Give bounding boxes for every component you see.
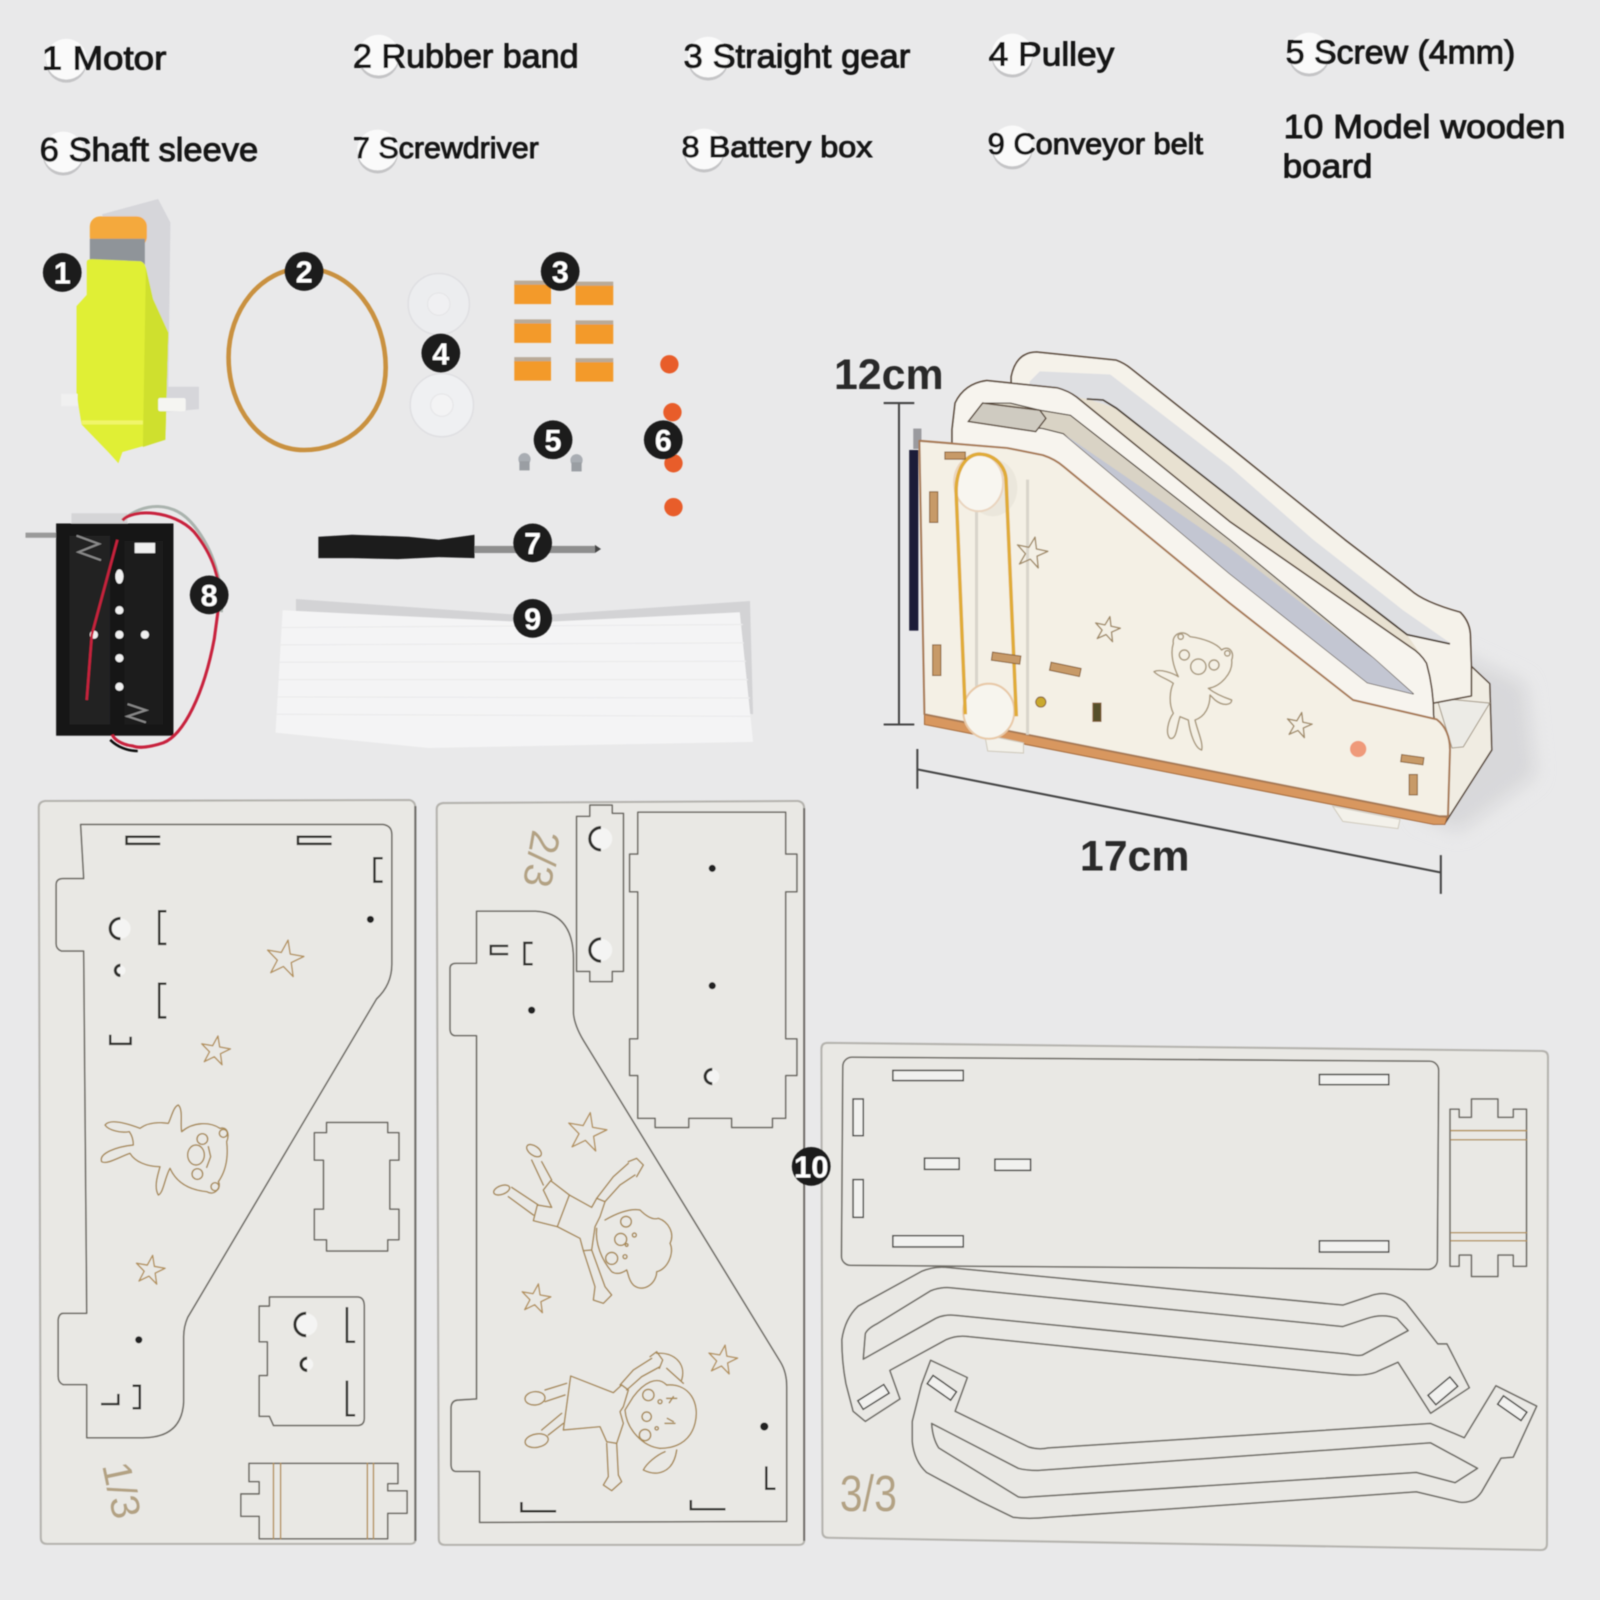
right edge shade — [414, 806, 416, 1541]
engraved child two — [524, 1352, 696, 1491]
dimension: length 17cm — [917, 749, 1441, 894]
rear side structure — [1429, 666, 1492, 823]
side panel outline — [56, 824, 392, 1438]
badge 4 — [421, 334, 460, 372]
side panel outline — [450, 911, 787, 1522]
part: screwdriver — [318, 535, 601, 559]
part: pulleys — [408, 273, 473, 437]
part: rubber band — [229, 268, 386, 450]
legend item 5: 5 Screw (4mm) — [1286, 34, 1515, 71]
badge 6 — [644, 420, 683, 459]
engraved bear — [1154, 633, 1233, 750]
badge 9: 9 — [524, 603, 541, 637]
connector part — [1450, 1099, 1527, 1277]
far handrail opening — [1030, 371, 1450, 643]
soft shadow — [1418, 653, 1536, 832]
battery box at rear — [909, 429, 921, 631]
legend item 6: 6 Shaft sleeve — [40, 132, 258, 169]
slots and holes — [101, 837, 383, 1408]
plate slots — [853, 1070, 1389, 1252]
legend item 9: 9 Conveyor belt — [988, 128, 1203, 161]
badge 8: 8 — [201, 579, 218, 613]
badge 1: 1 — [54, 257, 71, 291]
part: straight gears — [514, 281, 613, 382]
part: screws — [518, 453, 583, 471]
legend item 4: 4 Pulley — [989, 36, 1114, 73]
legend item 8 — [682, 129, 873, 172]
engraved bear — [101, 1105, 228, 1195]
board label 2/3: 2/3 — [514, 827, 569, 891]
belt guide strip — [977, 480, 1028, 735]
stars — [134, 937, 306, 1285]
number badges — [43, 252, 831, 1186]
slots and holes — [491, 943, 776, 1511]
wooden boards — [39, 800, 1548, 1550]
stars — [519, 1109, 739, 1375]
badge 9 — [513, 599, 552, 638]
board label 3/3: 3/3 — [840, 1465, 897, 1522]
legend item 8: 8 Battery box — [682, 131, 873, 164]
long plate — [841, 1057, 1439, 1269]
badge 5: 5 — [545, 424, 562, 458]
near handrail opening — [968, 403, 1413, 694]
engraved slots — [930, 452, 1424, 795]
top pulley — [954, 454, 1003, 511]
sub part strip — [577, 805, 623, 982]
part: battery box — [26, 506, 222, 751]
bottom plywood edge — [924, 714, 1447, 824]
assembled escalator model — [834, 351, 1536, 894]
yellow rubber band — [956, 454, 1016, 716]
sub part plate — [630, 812, 797, 1128]
badge 6: 6 — [655, 424, 672, 458]
far handrail — [1011, 352, 1471, 704]
dimension: height 12cm — [834, 351, 944, 724]
badge 3: 3 — [552, 256, 569, 290]
sub part b — [259, 1297, 364, 1426]
legend item 10: board — [1283, 149, 1372, 186]
board label 1/3: 1/3 — [93, 1458, 150, 1523]
legend item 3: 3 Straight gear — [684, 38, 910, 75]
board 3/3 — [821, 1043, 1548, 1550]
conveyor belt surface — [1050, 424, 1413, 694]
handrail upper — [842, 1267, 1469, 1421]
sub part a — [314, 1122, 399, 1251]
metal roller piece — [968, 403, 1046, 432]
shaded inner strip — [1077, 397, 1427, 663]
badge 10: 10 — [794, 1151, 829, 1185]
near handrail — [952, 381, 1437, 735]
board 1/3 — [39, 800, 415, 1544]
dimension: length 17cm: 17cm — [1080, 832, 1189, 880]
legend item 10: 10 Model wooden — [1284, 109, 1565, 146]
badge 2: 2 — [296, 256, 313, 290]
sub part c — [241, 1463, 407, 1539]
legend item 7: 7 Screwdriver — [353, 132, 539, 165]
board 2/3 — [437, 801, 804, 1545]
front side panel — [919, 441, 1450, 816]
parts legend — [40, 33, 1565, 186]
base tabs — [985, 735, 1400, 829]
badge 5 — [534, 420, 572, 459]
part: shaft sleeves — [660, 355, 683, 516]
bottom pulley — [963, 684, 1014, 739]
badge 7: 7 — [524, 527, 541, 561]
part: motor — [61, 199, 199, 463]
badge 8 — [190, 576, 229, 614]
badge 3 — [541, 252, 580, 291]
legend item 1: 1 Motor — [42, 40, 166, 77]
legend item 2: 2 Rubber band — [353, 38, 579, 75]
dimension: height 12cm: 12cm — [834, 351, 944, 399]
engraved child one — [492, 1142, 672, 1303]
part: conveyor belt — [276, 599, 753, 748]
inner floor — [1437, 698, 1490, 748]
right edge shade — [803, 808, 805, 1541]
handrail lower — [912, 1360, 1537, 1518]
components photo area — [26, 199, 753, 751]
badge 2 — [285, 252, 323, 291]
badge 1 — [43, 253, 82, 292]
badge 4: 4 — [432, 337, 449, 371]
far handrail inner line — [1087, 399, 1450, 644]
badge 7 — [513, 523, 552, 562]
pulley shadow — [968, 459, 1017, 516]
legend item 10 — [1283, 109, 1565, 186]
engraved stars — [1014, 534, 1314, 739]
